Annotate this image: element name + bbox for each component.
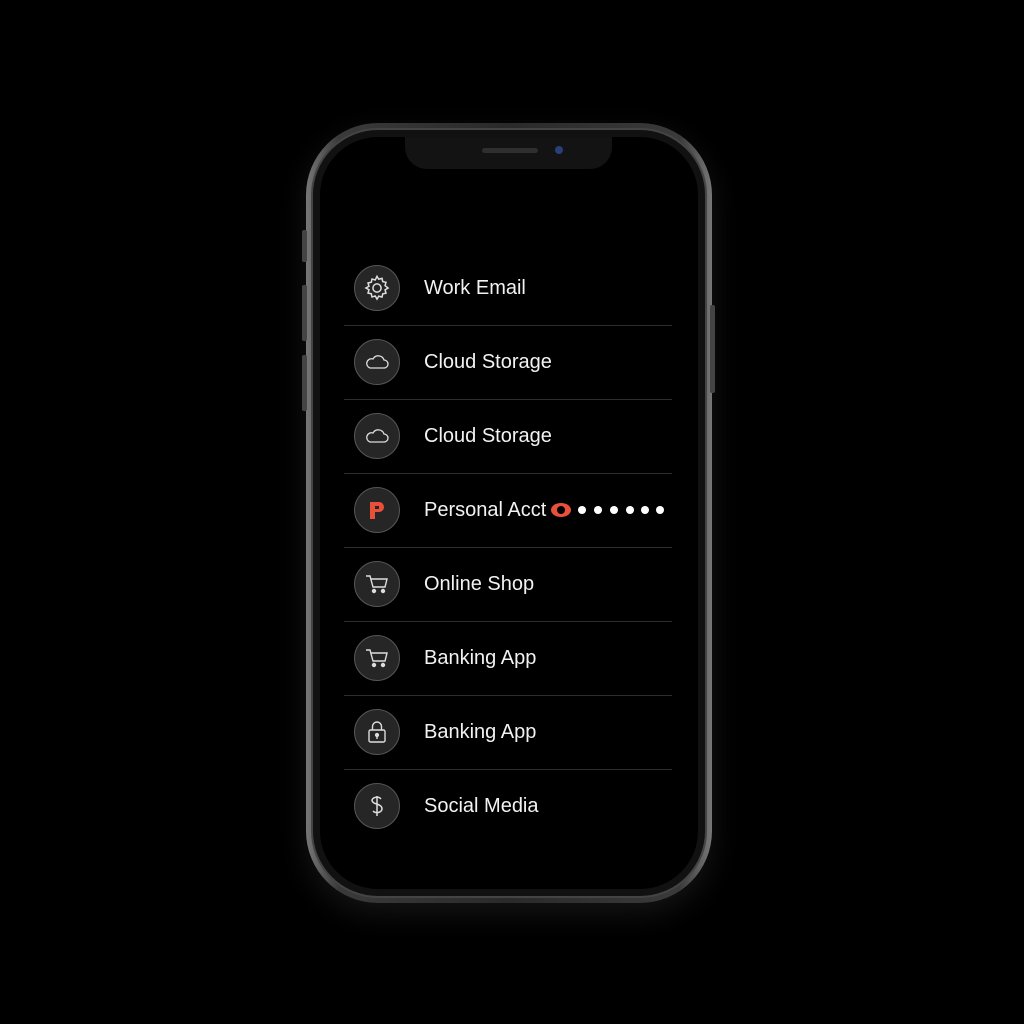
phone body: [306, 123, 712, 903]
row: Cloud Storage: [344, 339, 672, 400]
row: Social Media: [354, 783, 539, 829]
row: Cloud Storage 2: [344, 413, 672, 474]
row: Banking App (lock): Banking App: [424, 721, 536, 743]
row: Banking App (cart): [344, 635, 672, 696]
row: Social Media: Social Media: [424, 795, 539, 817]
row: Online Shop: Online Shop: [424, 573, 534, 595]
icon: eye and password dots: [551, 503, 664, 517]
row: Online Shop: [344, 561, 672, 622]
row: Personal Acct: Personal Acct: [424, 499, 546, 521]
row: Banking App (cart): Banking App: [424, 647, 536, 669]
notch: [405, 137, 612, 169]
side buttons: [302, 230, 307, 262]
row: Cloud Storage 2: Cloud Storage: [424, 425, 552, 447]
row: Banking App (lock): [344, 709, 672, 770]
row: Work Email: [344, 265, 672, 326]
list: [344, 265, 672, 829]
row: Personal Acct: [344, 487, 672, 548]
row: Cloud Storage: Cloud Storage: [424, 351, 552, 373]
row: Work Email: Work Email: [424, 277, 526, 299]
